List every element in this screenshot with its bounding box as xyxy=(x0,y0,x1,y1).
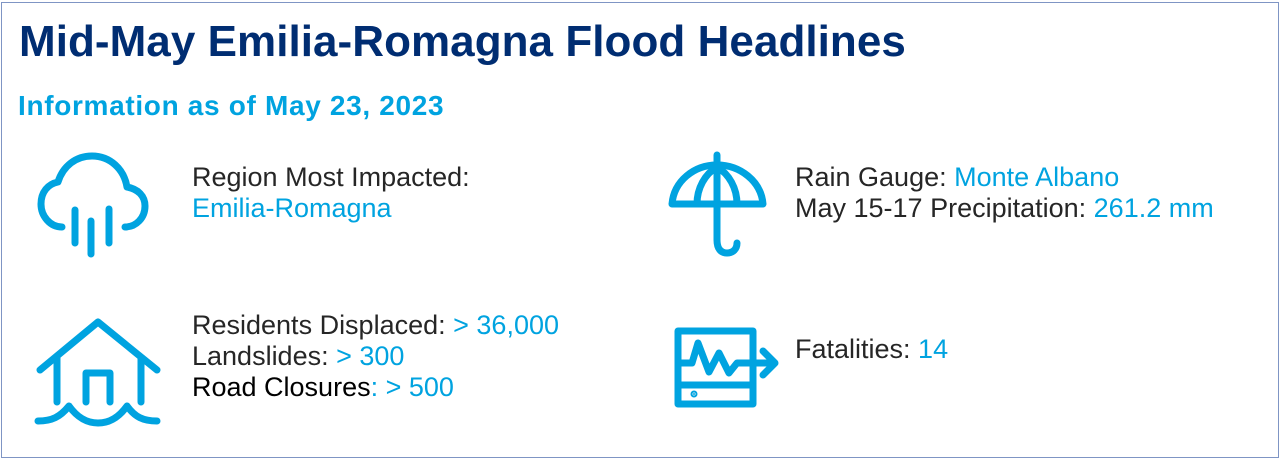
title: Mid-May Emilia-Romagna Flood Headlines xyxy=(19,17,906,66)
text block: rain gauge and precipitation xyxy=(795,162,1214,223)
text block: displaced, landslides, road closures xyxy=(192,310,559,402)
text block: region most impacted: Region Most Impacted: xyxy=(192,162,470,192)
text block: region most impacted xyxy=(192,162,470,223)
text block: rain gauge and precipitation: Rain Gauge: Monte Albano xyxy=(795,162,1119,192)
icon: umbrella xyxy=(672,155,763,253)
text block: displaced, landslides, road closures: Landslides: > 300 xyxy=(192,341,404,371)
icon: flooded house xyxy=(38,322,157,423)
text block: displaced, landslides, road closures: Road Closures: > 500 xyxy=(192,372,454,402)
icon: monitor with graph xyxy=(678,331,775,404)
icon: rain cloud xyxy=(41,156,145,254)
text block: displaced, landslides, road closures: Residents Displaced: > 36,000 xyxy=(192,310,559,340)
text block: fatalities: Fatalities: 14 xyxy=(795,334,948,364)
text block: rain gauge and precipitation: May 15-17 Precipitation: 261.2 mm xyxy=(795,193,1214,223)
subtitle: information date: Information as of May 23, 2023 xyxy=(18,90,444,121)
text block: region most impacted: Emilia-Romagna xyxy=(192,193,392,223)
